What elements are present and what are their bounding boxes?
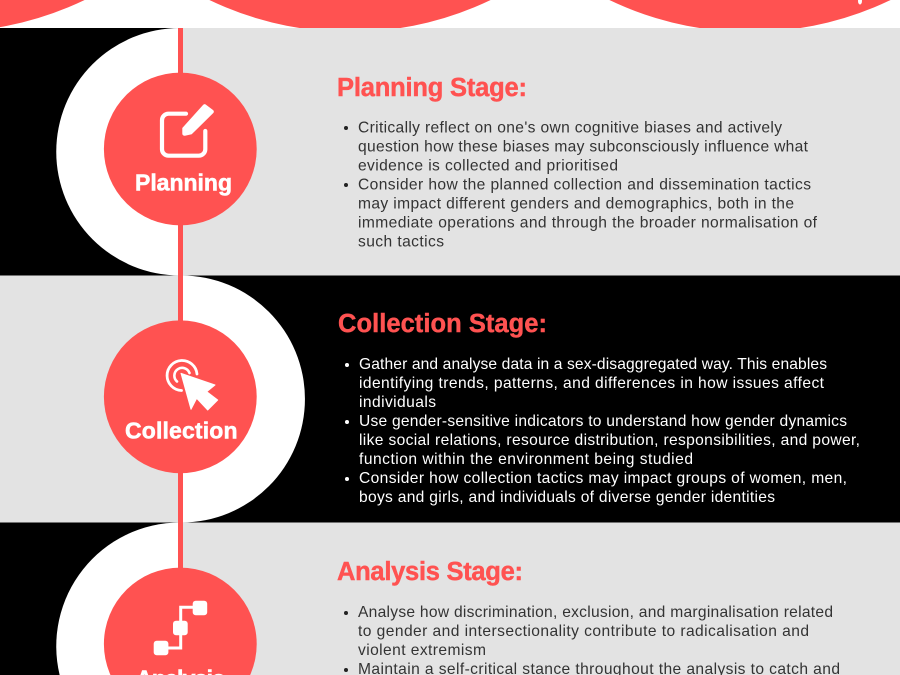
list: planning bullets bbox=[344, 120, 818, 250]
list: analysis bullets: Analyse how discrimination, exclusion, and marginalisation related bbox=[358, 604, 833, 621]
list: planning bullets: Critically reflect on one's own cognitive biases and actively bbox=[358, 120, 782, 136]
list: collection bullets: Consider how collection tactics may impact groups of women, men, bbox=[359, 470, 847, 487]
list: analysis bullets bbox=[344, 604, 840, 675]
collection badge bbox=[104, 320, 257, 473]
list: planning bullets: Consider how the planned collection and dissemination tactics bbox=[358, 176, 811, 194]
top strip: red circles from previous section bbox=[0, 0, 900, 32]
list: collection bullets: boys and girls, and individuals of diverse gender identities bbox=[359, 489, 775, 506]
label: Planning: Planning bbox=[135, 170, 232, 196]
list: planning bullets: such tactics bbox=[358, 234, 444, 250]
list: collection bullets: individuals bbox=[359, 394, 436, 411]
list: collection bullets: Gather and analyse data in a sex-disaggregated way. This enables bbox=[359, 356, 827, 373]
heading: Analysis Stage: Analysis Stage: bbox=[337, 558, 523, 586]
label: Collection: Collection bbox=[125, 418, 238, 444]
icon: cursor click bbox=[167, 361, 218, 410]
list: planning bullets: evidence is collected and prioritised bbox=[358, 158, 618, 174]
list: collection bullets: function within the environment being studied bbox=[359, 451, 693, 468]
list: planning bullets: question how these biases may subconsciously influence what bbox=[358, 138, 809, 156]
list: collection bullets: Use gender-sensitive indicators to understand how gender dynamics bbox=[359, 413, 847, 430]
icon: edit pencil bbox=[162, 104, 214, 156]
heading: Planning Stage: Planning Stage: bbox=[337, 74, 527, 102]
panel: planning stage bbox=[0, 28, 900, 276]
list: collection bullets: like social relations, resource distribution, responsibilities, and power, bbox=[359, 432, 860, 449]
heading: Collection Stage: Collection Stage: bbox=[338, 310, 547, 338]
list: analysis bullets: violent extremism bbox=[358, 642, 486, 659]
list: planning bullets: may impact different genders and demographics, both in the bbox=[358, 196, 794, 212]
list: planning bullets: immediate operations and through the broader normalisation of bbox=[358, 214, 818, 232]
list: collection bullets bbox=[345, 356, 860, 506]
analysis badge bbox=[104, 568, 257, 675]
list: analysis bullets: to gender and intersectionality contribute to radicalisation and bbox=[358, 623, 809, 640]
list: collection bullets: identifying trends, patterns, and differences in how issues affect bbox=[359, 375, 825, 392]
panel: collection stage bbox=[0, 276, 900, 522]
planning badge bbox=[104, 73, 257, 225]
icon: connected nodes bbox=[154, 601, 207, 655]
panel: analysis stage bbox=[0, 522, 900, 675]
